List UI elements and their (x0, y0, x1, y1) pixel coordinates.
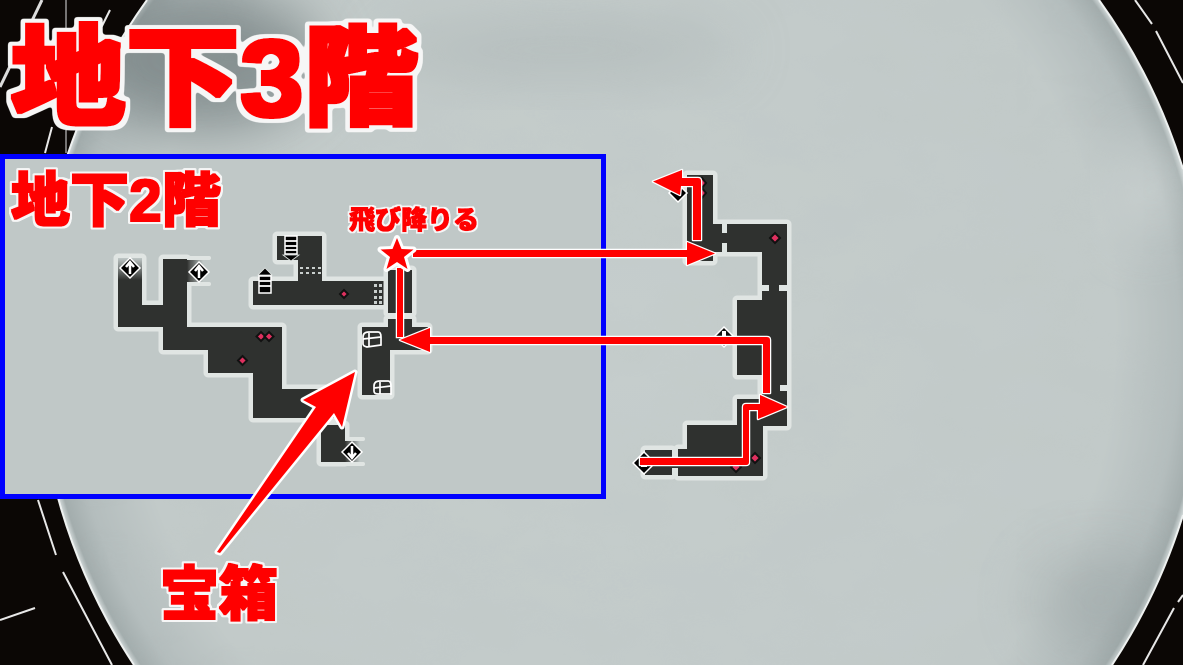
icon: up stairs marker right (189, 262, 209, 282)
arrow: bottom door to right room (640, 395, 787, 465)
arrow: drop line under star (397, 268, 403, 337)
arrow: long return to upper chest room (400, 328, 770, 393)
door connector lower left (672, 457, 678, 468)
icon: ladder up (258, 268, 272, 293)
panel: basement 2 inset (2, 156, 604, 496)
icon: door marker top (669, 184, 687, 202)
icon: red gem markers basement 2 (238, 290, 348, 365)
door fade: room top left (118, 258, 142, 280)
icon: red gem markers basement 3 (698, 178, 780, 472)
label: jump down: 飛び降りる (349, 205, 479, 235)
door stub: room top right (187, 256, 211, 286)
label: treasure chest: 宝箱 (160, 562, 278, 628)
title: 地下3階 (11, 18, 418, 139)
icon: door marker middle (714, 327, 734, 347)
icon: up stairs marker left (120, 258, 140, 278)
arrow: pointer to treasure chests (217, 372, 355, 553)
icon: treasure chest lower (374, 381, 391, 394)
floor map: basement 3 (645, 175, 787, 476)
heading: basement 2: 地下2階 (11, 168, 221, 234)
icon: treasure chest upper (363, 332, 381, 347)
icon: ladder down (283, 236, 299, 261)
floor grid dots (300, 267, 382, 304)
arrow: up to top-left exit (653, 170, 701, 240)
door tabs basement 3 (672, 221, 789, 478)
door stub: room bottom (345, 437, 365, 466)
icon: star jump point (380, 238, 414, 269)
icon: door marker bottom (633, 452, 655, 474)
basement 2 floor map (118, 236, 428, 462)
icon: down stairs marker (342, 442, 362, 462)
arrow: star to basement 3 entry (413, 242, 715, 265)
